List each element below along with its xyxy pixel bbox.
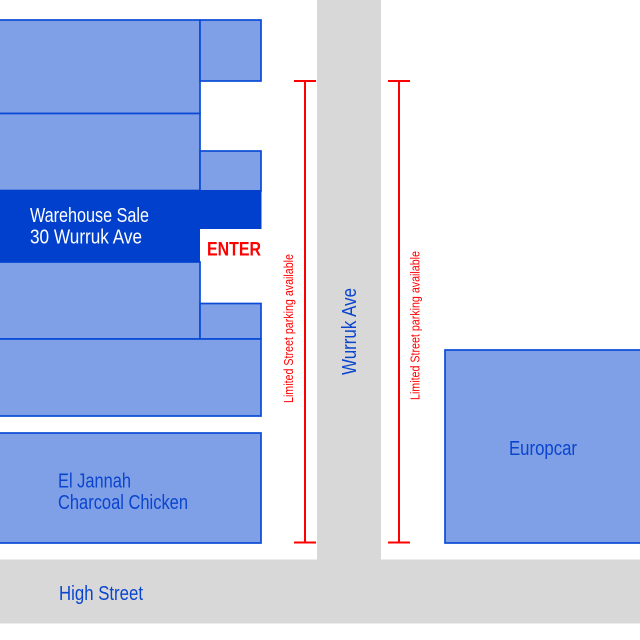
- parking marker: left: [294, 81, 316, 542]
- building: third main: [0, 262, 200, 339]
- label: enter: ENTER: [207, 240, 261, 260]
- label: Wurruk Ave: Wurruk Ave: [339, 288, 361, 375]
- label: High Street: High Street: [59, 583, 143, 605]
- label: warehouse sale address: Warehouse Sale: [30, 205, 149, 227]
- label: warehouse sale address: 30 Wurruk Ave: [30, 226, 142, 248]
- building: top annex: [200, 20, 261, 81]
- building: top main: [0, 20, 200, 114]
- label: warehouse sale address: [30, 205, 149, 248]
- building: second annex: [200, 151, 261, 191]
- parking label: left: Limited Street parking available: [282, 254, 296, 403]
- label: El Jannah Charcoal Chicken: Charcoal Chicken: [58, 492, 188, 514]
- building: fourth: [0, 339, 261, 416]
- building: third annex: [200, 304, 261, 339]
- label: Europcar: Europcar: [509, 438, 577, 460]
- building: warehouse sale highlighted: [0, 190, 262, 262]
- road: Wurruk Ave: [317, 0, 381, 560]
- road: High Street: [0, 560, 640, 624]
- label: El Jannah Charcoal Chicken: El Jannah: [58, 470, 131, 492]
- building: El Jannah: [0, 433, 261, 543]
- parking label: right: Limited Street parking available: [408, 251, 422, 400]
- building: Europcar: [445, 350, 640, 543]
- building: second main: [0, 114, 200, 190]
- parking marker: right: [388, 81, 410, 542]
- label: El Jannah Charcoal Chicken: [58, 470, 188, 514]
